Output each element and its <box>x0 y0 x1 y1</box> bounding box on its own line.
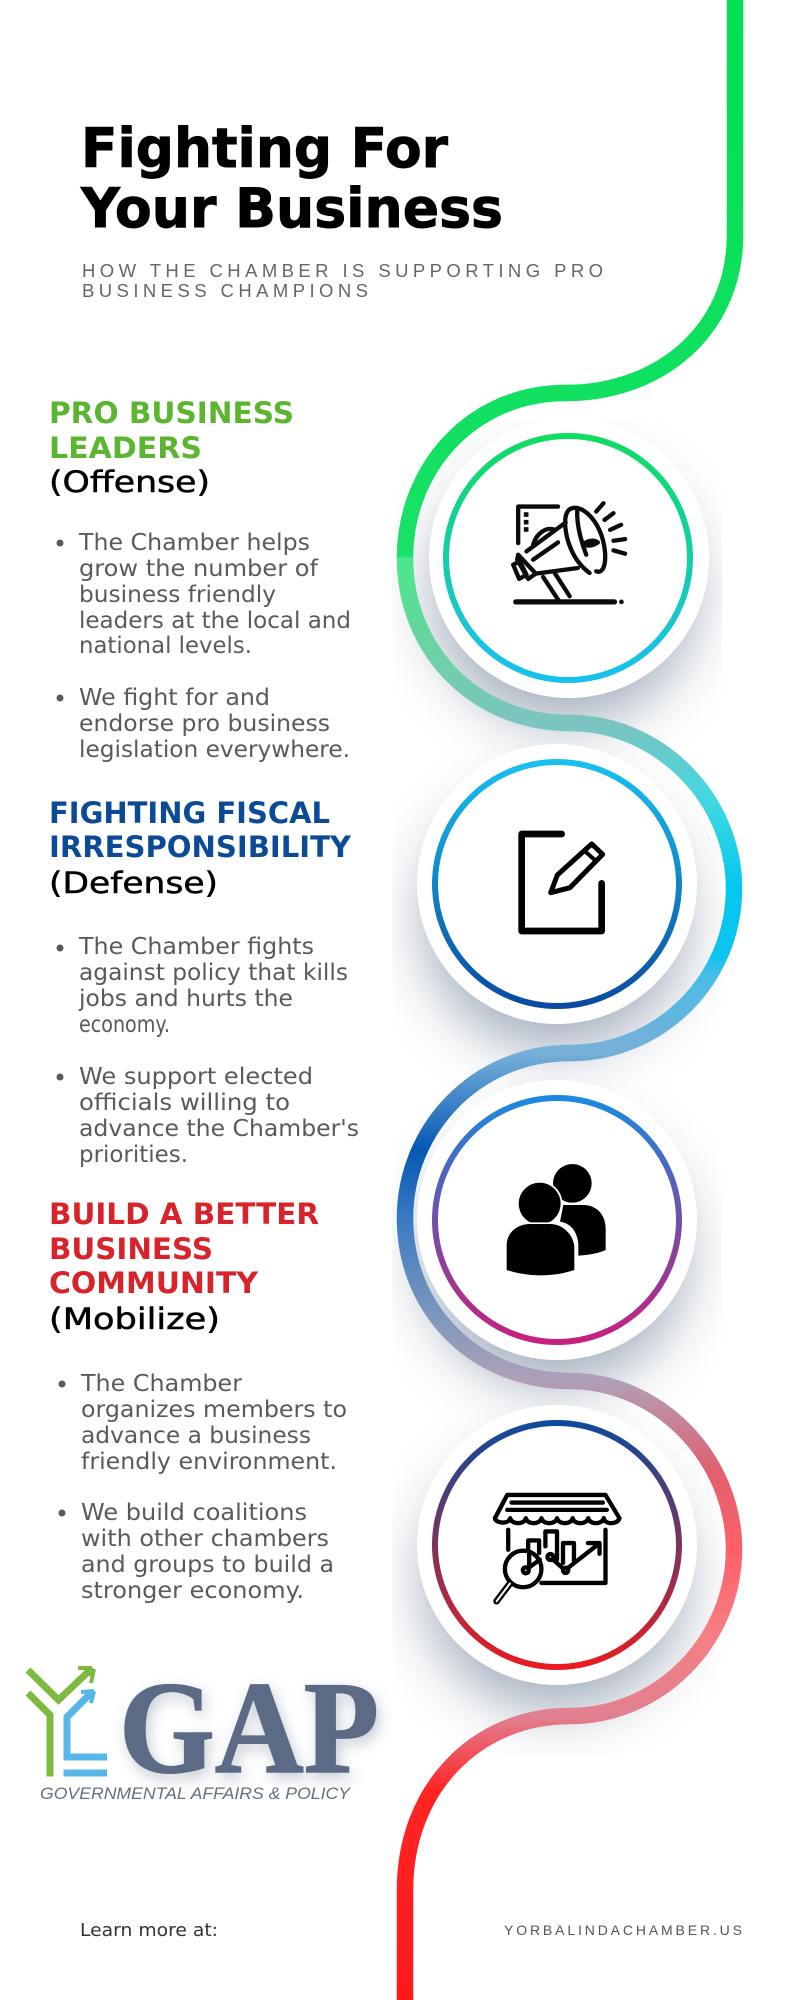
bullet: support elected officials: priorities. <box>79 1142 188 1168</box>
heading: build a better business community: (Mobilize) <box>49 1302 220 1336</box>
heading: fighting fiscal irresponsibility <box>49 796 352 900</box>
bullet: grow business friendly leaders: business friendly <box>79 582 276 608</box>
footer: website: YORBALINDACHAMBER.US <box>504 1922 742 1938</box>
heading: build a better business community: BUSINESS <box>49 1232 213 1266</box>
logo tagline: GOVERNMENTAL AFFAIRS & POLICY <box>40 1784 352 1803</box>
icon: note with pencil <box>522 834 603 931</box>
bullet: endorse legislation: We fight for and <box>79 685 270 711</box>
circle 1: megaphone <box>429 418 709 698</box>
heading: build a better business community: BUILD A BETTER <box>49 1197 319 1231</box>
icon: two people <box>507 1164 606 1275</box>
heading: pro business leaders: LEADERS <box>49 431 202 465</box>
bullet: grow business friendly leaders: national levels. <box>79 633 252 659</box>
bullet: organizes members: advance a business <box>81 1423 311 1449</box>
bullet: organizes members <box>58 1371 347 1475</box>
title <box>80 117 503 240</box>
bullet: organizes members: friendly environment. <box>81 1449 337 1475</box>
bullet: endorse legislation <box>56 685 350 763</box>
circle shadows <box>425 462 694 1709</box>
title: Fighting For <box>81 117 448 180</box>
heading: pro business leaders: (Offense) <box>49 465 210 499</box>
subtitle <box>82 260 603 301</box>
icon: megaphone <box>513 503 625 604</box>
heading: pro business leaders: PRO BUSINESS <box>49 396 294 430</box>
circle 3: people <box>417 1080 697 1360</box>
bullet: support elected officials <box>56 1064 359 1168</box>
bullet: build coalitions <box>58 1500 334 1604</box>
circle 4: storefront analytics <box>417 1405 697 1685</box>
bullet: grow business friendly leaders <box>56 530 351 659</box>
heading: build a better business community: COMMUNITY <box>49 1266 259 1300</box>
subtitle: HOW THE CHAMBER IS SUPPORTING PRO <box>82 260 603 281</box>
heading: fighting fiscal irresponsibility: (Defense) <box>49 866 218 900</box>
bullet: build coalitions: stronger economy. <box>81 1578 304 1604</box>
bullet: fights harmful policy: economy. <box>79 1012 170 1038</box>
bullet: grow business friendly leaders: leaders at the local and <box>79 608 351 634</box>
heading: build a better business community <box>49 1197 319 1336</box>
bullet: build coalitions: with other chambers <box>81 1526 329 1552</box>
logo mark <box>28 1668 107 1776</box>
bullet: fights harmful policy <box>56 934 348 1038</box>
heading: fighting fiscal irresponsibility: IRRESPONSIBILITY <box>49 830 352 864</box>
gradient ribbon path <box>405 0 735 2000</box>
heading: pro business leaders <box>49 396 294 499</box>
heading: fighting fiscal irresponsibility: FIGHTING FISCAL <box>49 796 330 830</box>
logo: GAP <box>28 1654 379 1803</box>
title: Your Business <box>80 177 503 240</box>
footer: learn more: Learn more at: <box>80 1920 218 1941</box>
icon: storefront with magnifier and chart <box>495 1495 619 1601</box>
bullet: build coalitions: and groups to build a <box>81 1552 334 1578</box>
bullet: endorse legislation: endorse pro business <box>79 711 330 737</box>
bullet: organizes members: The Chamber <box>80 1371 243 1397</box>
bullet: build coalitions: We build coalitions <box>81 1500 307 1526</box>
bullet: fights harmful policy: jobs and hurts the <box>78 986 293 1012</box>
bullet: fights harmful policy: The Chamber fights <box>78 934 314 960</box>
circle 2: edit document <box>417 744 697 1024</box>
logo wordmark: GAP <box>119 1654 379 1801</box>
bullet: grow business friendly leaders: grow the number of <box>79 556 319 582</box>
bullet: support elected officials: officials willing to <box>79 1090 290 1116</box>
panel: build a better business community <box>49 1197 347 1604</box>
bullet: fights harmful policy: against policy that kills <box>79 960 348 986</box>
bullet: endorse legislation: legislation everywhere. <box>79 737 350 763</box>
bullet: organizes members: organizes members to <box>81 1397 347 1423</box>
bullet: grow business friendly leaders: The Chamber helps <box>78 530 310 556</box>
bullet: support elected officials: We support elected <box>79 1064 313 1090</box>
subtitle: BUSINESS CHAMPIONS <box>82 280 368 301</box>
bullet: support elected officials: advance the Chamber's <box>79 1116 359 1142</box>
panel: fighting fiscal irresponsibility <box>49 796 359 1168</box>
panel: pro business leaders <box>49 396 351 763</box>
